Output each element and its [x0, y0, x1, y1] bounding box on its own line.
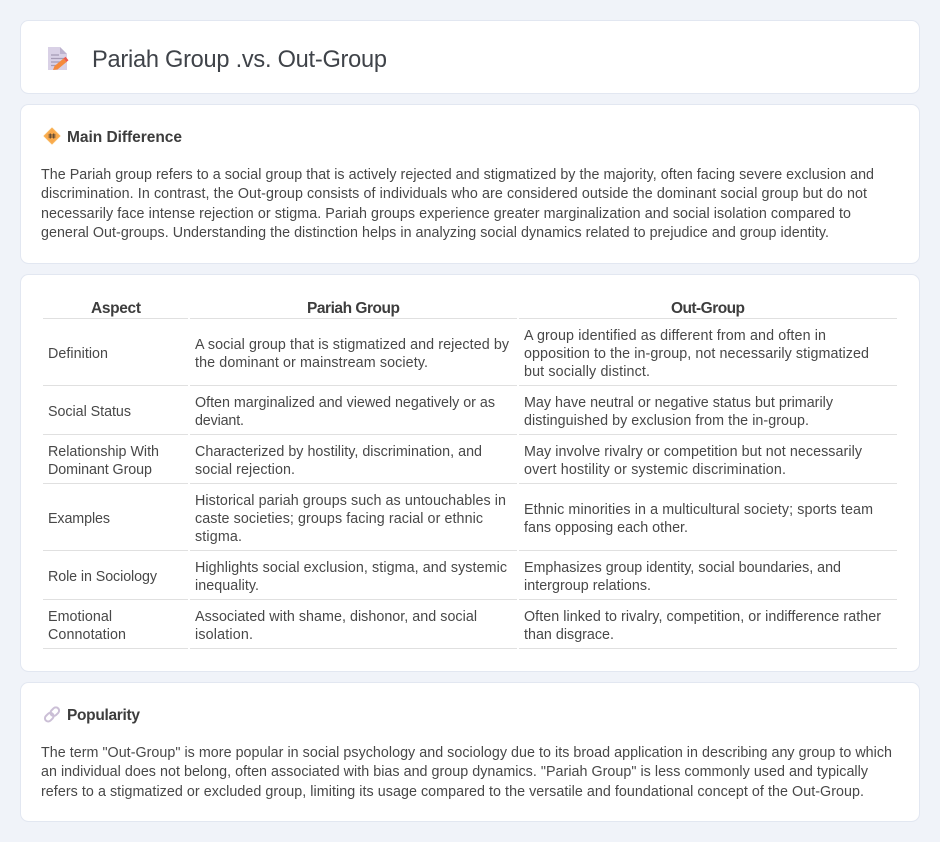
table row: relationship with dominant group: overt hostility or systemic discrimination. — [524, 462, 786, 478]
panel: main difference — [20, 104, 920, 264]
table row: relationship with dominant group: social rejection. — [195, 462, 295, 478]
panel: header — [20, 20, 920, 94]
table row: relationship with dominant group — [43, 444, 897, 484]
table row: definition: the dominant or mainstream society. — [195, 355, 428, 371]
text block: main difference paragraph — [41, 167, 874, 241]
table header row: Pariah Group — [307, 300, 400, 317]
table row: examples: fans opposing each other. — [524, 520, 688, 536]
table row: examples: stigma. — [195, 529, 242, 545]
table row: examples: Examples — [48, 511, 110, 527]
table row: definition: but socially distinct. — [524, 364, 650, 380]
table row: relationship with dominant group: May involve rivalry or competition but not necessarily — [524, 444, 863, 460]
table row: role in sociology — [43, 560, 897, 600]
table row: role in sociology: intergroup relations. — [524, 578, 651, 594]
table header row: Out-Group — [671, 300, 745, 317]
table row: emotional connotation: than disgrace. — [524, 627, 614, 643]
table row: examples: caste societies; groups facing racial or ethnic — [195, 511, 483, 527]
table row: emotional connotation: isolation. — [195, 627, 253, 643]
icon: warning diamond — [44, 128, 60, 144]
table row: role in sociology: Emphasizes group identity, social boundaries, and — [524, 560, 841, 576]
table row: definition: opposition to the in-group, not necessarily stigmatized — [524, 346, 869, 362]
text block: popularity paragraph: The term "Out-Group" is more popular in social psychology and sociology due to its broad application in describing any group to which — [41, 745, 892, 761]
heading: main difference: Main Difference — [67, 129, 182, 146]
text block: popularity paragraph — [41, 745, 892, 800]
table row: role in sociology: Role in Sociology — [48, 569, 158, 585]
table row: emotional connotation — [43, 609, 897, 649]
panel: popularity — [20, 682, 920, 822]
text block: main difference paragraph: The Pariah group refers to a social group that is actively rejected and stigmatized by the majority, often facing severe exclusion and — [41, 167, 874, 183]
icon: chain link — [44, 706, 60, 723]
table row: role in sociology: Highlights social exclusion, stigma, and systemic — [195, 560, 507, 576]
table row: definition: Definition — [48, 346, 108, 362]
table row: role in sociology: inequality. — [195, 578, 259, 594]
table row: relationship with dominant group: Relationship With — [48, 444, 159, 460]
table row: social status: deviant. — [195, 413, 244, 429]
icon: document with pencil — [48, 47, 68, 70]
table row: emotional connotation: Connotation — [48, 627, 126, 643]
table row: definition: A group identified as different from and often in — [524, 328, 826, 344]
text block: popularity paragraph: an individual does not belong, often associated with bias and group dynamics. "Pariah Group" is less commonly used and typically — [41, 764, 869, 780]
table row: examples: Ethnic minorities in a multicultural society; sports team — [524, 502, 873, 518]
table row: emotional connotation: Associated with shame, dishonor, and social — [195, 609, 477, 625]
table row: social status: distinguished by exclusion from the in-group. — [524, 413, 809, 429]
panel: comparison table — [20, 274, 920, 672]
title: Pariah Group .vs. Out-Group — [92, 47, 387, 73]
table row: emotional connotation: Often linked to rivalry, competition, or indifference rather — [524, 609, 881, 625]
table row: relationship with dominant group: Characterized by hostility, discrimination, and — [195, 444, 482, 460]
table row: definition — [43, 328, 897, 386]
text block: main difference paragraph: discrimination. In contrast, the Out-group consists of individuals who are considered outside the dominant social group but do not — [41, 186, 867, 202]
table row: social status: Often marginalized and viewed negatively or as — [195, 395, 495, 411]
text block: popularity paragraph: refers to a stigmatized or excluded group, limiting its usage compared to the versatile and foundational concept of the Out-Group. — [41, 784, 864, 800]
text block: main difference paragraph: general Out-groups. Understanding the distinction helps in analyzing social dynamics related to prejudice and group identity. — [41, 225, 829, 241]
table row: social status — [43, 395, 897, 435]
table header row — [43, 300, 897, 319]
table row: examples — [43, 493, 897, 551]
table row: relationship with dominant group: Dominant Group — [48, 462, 152, 478]
table row: definition: A social group that is stigmatized and rejected by — [195, 337, 510, 353]
table header row: Aspect — [91, 300, 141, 317]
text block: main difference paragraph: necessarily face intense rejection or stigma. Pariah groups experience greater marginalization and social isolation compared to — [41, 206, 851, 222]
heading: popularity: Popularity — [67, 707, 140, 724]
table row: social status: Social Status — [48, 404, 131, 420]
table row: emotional connotation: Emotional — [48, 609, 112, 625]
table row: social status: May have neutral or negative status but primarily — [524, 395, 834, 411]
table row: examples: Historical pariah groups such as untouchables in — [195, 493, 506, 509]
